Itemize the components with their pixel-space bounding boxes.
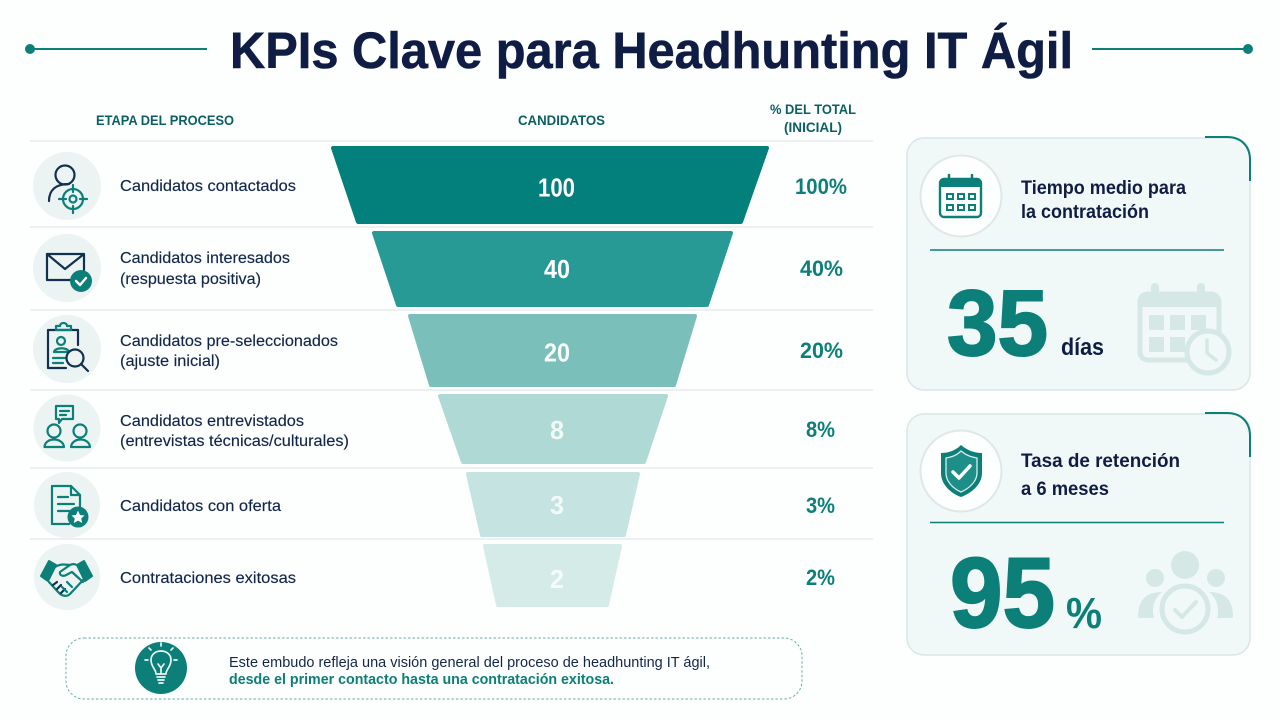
funnel stage 2: 2 (550, 564, 564, 594)
percentages column: 3% (806, 493, 835, 518)
panel: tasa de retención a 6 meses: Tasa de retención (1021, 451, 1180, 472)
callout: funnel note: desde el primer contacto hasta una contratación exitosa. (229, 671, 614, 688)
icon: calendar (920, 156, 1002, 236)
icon: ghost team with check (1138, 551, 1233, 632)
funnel stage 20 (410, 316, 695, 385)
funnel stage 40 (374, 233, 731, 305)
funnel stage 100 (333, 148, 767, 222)
percentages column: 40% (800, 256, 843, 281)
funnel stage 3: 3 (550, 490, 564, 520)
percentages column: 2% (806, 565, 835, 590)
funnel stage 3 (468, 474, 638, 535)
funnel stage 8 (440, 396, 666, 462)
table header: ETAPA DEL PROCESO (96, 112, 234, 128)
percentages column (795, 174, 847, 590)
icon: two people with speech bubble (44, 406, 90, 447)
row: candidatos pre-seleccionados (33, 315, 338, 383)
funnel stage 2 (485, 546, 620, 605)
funnel stage 20: 20 (544, 338, 570, 368)
panel: tiempo medio para la contratación: días (1061, 334, 1104, 361)
percentages column: 8% (806, 417, 835, 442)
row: candidatos entrevistados (34, 394, 349, 462)
panel: tasa de retención a 6 meses: % (1066, 589, 1102, 638)
percentages column: 20% (800, 338, 843, 363)
panel: tasa de retención a 6 meses (907, 413, 1250, 655)
icon: person with target (49, 166, 87, 213)
row: candidatos pre-seleccionados: (ajuste inicial) (120, 353, 220, 370)
row: candidatos con oferta: Candidatos con oferta (120, 498, 281, 515)
funnel stage 100: 100 (538, 172, 575, 202)
title: KPIs Clave para Headhunting IT Ágil (230, 22, 1073, 79)
table header: % DEL TOTAL (770, 101, 856, 117)
callout: funnel note (66, 638, 802, 699)
row: contrataciones exitosas: Contrataciones exitosas (120, 570, 296, 587)
row: candidatos interesados: Candidatos interesados (120, 250, 290, 267)
panel: tiempo medio para la contratación (907, 137, 1250, 390)
funnel chart (333, 148, 767, 605)
icon: handshake (41, 561, 92, 596)
icon: ghost calendar with clock (1138, 283, 1229, 373)
percentages column: 100% (795, 174, 847, 199)
icon: clipboard with magnifier (48, 323, 88, 371)
panel: tasa de retención a 6 meses: 95 (950, 537, 1055, 648)
funnel stage 40: 40 (544, 254, 570, 284)
panel: tiempo medio para la contratación: Tiempo medio para (1021, 178, 1186, 199)
row: candidatos contactados (33, 152, 296, 220)
row: candidatos con oferta (34, 472, 281, 538)
row: candidatos interesados (33, 234, 290, 302)
row: candidatos pre-seleccionados: Candidatos pre-seleccionados (120, 333, 338, 350)
row: candidatos entrevistados: Candidatos entrevistados (120, 413, 304, 430)
panel: tiempo medio para la contratación: 35 (947, 271, 1048, 375)
row: candidatos contactados: Candidatos contactados (120, 178, 296, 195)
icon: envelope with check (47, 254, 92, 292)
icon: document with star (52, 486, 88, 528)
table header: CANDIDATOS (518, 112, 605, 128)
icon: shield with check (920, 430, 1002, 512)
panel: tasa de retención a 6 meses: a 6 meses (1021, 479, 1109, 500)
row: contrataciones exitosas (34, 544, 296, 610)
row: candidatos entrevistados: (entrevistas técnicas/culturales) (120, 433, 349, 450)
funnel stage 8: 8 (550, 415, 564, 445)
callout: funnel note: Este embudo refleja una visión general del proceso de headhunting IT ágil, (229, 654, 710, 671)
icon: lightbulb (135, 642, 187, 694)
panel: tiempo medio para la contratación: la contratación (1021, 202, 1149, 223)
table header: (INICIAL) (784, 119, 842, 135)
row: candidatos interesados: (respuesta positiva) (120, 271, 261, 288)
table header (96, 101, 856, 135)
